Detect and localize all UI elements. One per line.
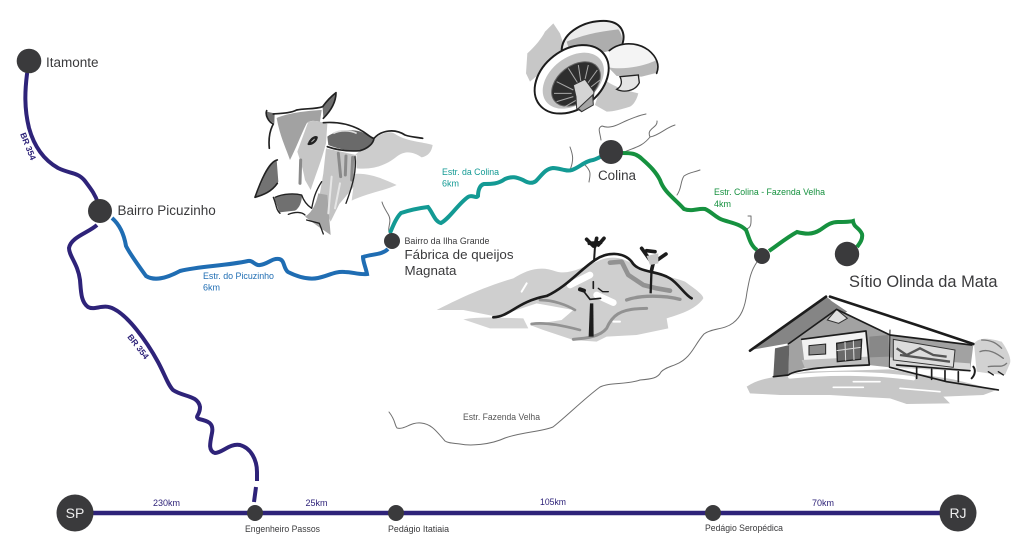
label: BR 354 upper: BR 354 [18, 131, 38, 162]
label: Estrada da Colina [442, 167, 499, 188]
road: SP to RJ highway [75, 511, 958, 515]
label: Estrada do Picuzinho: 6km [203, 282, 220, 292]
label: Estrada do Picuzinho: Estr. do Picuzinho [203, 271, 274, 281]
label: Bairro Picuzinho: Bairro Picuzinho [118, 203, 216, 218]
road: BR 354 lower [69, 225, 257, 502]
node: Sítio Olinda da Mata [835, 242, 859, 266]
label: Itamonte: Itamonte [46, 55, 99, 70]
label: BR 354 lower: BR 354 [125, 332, 151, 361]
illustration: hill with trees [437, 238, 703, 342]
label: Estrada do Picuzinho [203, 271, 274, 292]
node: Engenheiro Passos [247, 505, 263, 521]
label: Estrada da Colina: 6km [442, 178, 459, 188]
label: Engenheiro Passos: Engenheiro Passos [245, 524, 320, 534]
label: RJ: RJ [949, 505, 967, 521]
label: Colina: Colina [598, 168, 637, 183]
label: 25km: 25km [306, 498, 328, 508]
label: 230km: 230km [153, 498, 180, 508]
node: Pedágio Seropédica [705, 505, 721, 521]
illustration: mushrooms [521, 21, 658, 128]
label: Estrada da Colina: Estr. da Colina [442, 167, 499, 177]
node: Bairro Picuzinho [88, 199, 112, 223]
road: Estrada do Picuzinho [112, 218, 388, 279]
label: Estrada Fazenda Velha: Estr. Fazenda Velha [463, 412, 540, 422]
label: 70km: 70km [812, 498, 834, 508]
label: Estrada Colina - Fazenda Velha: 4km [714, 199, 731, 209]
label: Fábrica de queijos Magnata [404, 247, 514, 278]
label: Estrada Colina - Fazenda Velha: Estr. Colina - Fazenda Velha [714, 187, 825, 197]
road: BR 354 upper [25, 74, 98, 203]
node: Itamonte [17, 49, 41, 73]
label: Fábrica de queijos Magnata: Magnata [404, 263, 457, 278]
node: Pedágio Itatiaia [388, 505, 404, 521]
node: SP [56, 494, 94, 532]
label: Bairro da Ilha Grande: Bairro da Ilha Grande [404, 236, 490, 246]
label: Pedágio Itatiaia: Pedágio Itatiaia [388, 524, 449, 534]
node: RJ [940, 494, 976, 532]
illustration: cow [255, 93, 433, 235]
road: Estrada da Colina [390, 155, 604, 233]
node: Colina [599, 140, 623, 164]
illustration: house [747, 297, 1010, 404]
road: thin side roads [382, 114, 757, 445]
label: 105km: 105km [540, 497, 566, 507]
label: SP: SP [66, 505, 84, 521]
road: Estrada Colina - Fazenda Velha [622, 153, 862, 251]
label: Sítio Olinda da Mata: Sítio Olinda da Mata [849, 273, 998, 291]
label: Fábrica de queijos Magnata: Fábrica de queijos [404, 247, 514, 262]
node: Bairro da Ilha Grande [384, 233, 400, 249]
label: Estrada Colina - Fazenda Velha [714, 187, 825, 209]
label: Pedágio Seropédica: Pedágio Seropédica [705, 523, 783, 533]
node: junction Fazenda Velha [754, 248, 770, 264]
